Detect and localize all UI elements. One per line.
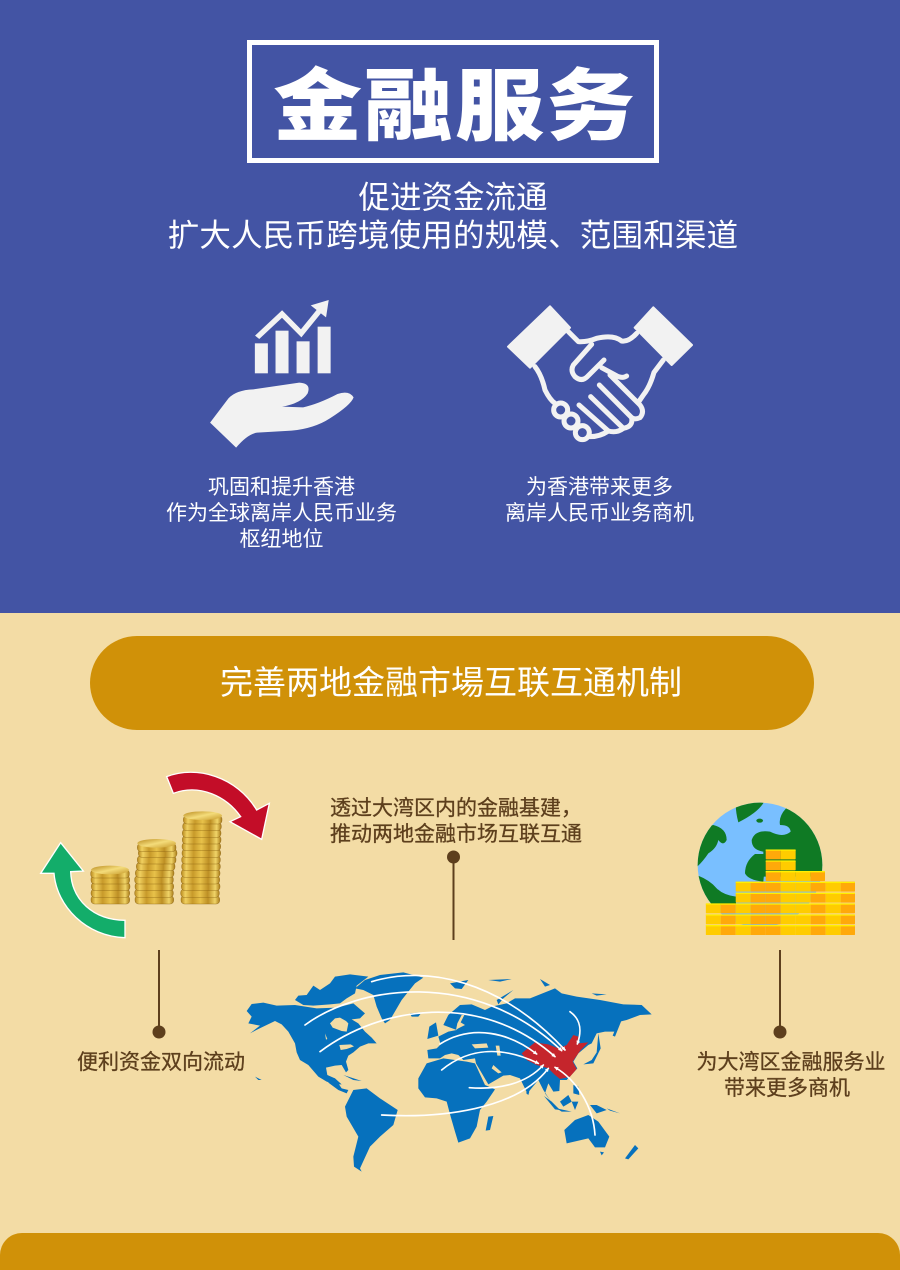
heading text: 完善两地金融市場互联互通机制 (220, 664, 682, 701)
icon: handshake (506, 305, 693, 442)
eurasia and china (427, 979, 652, 1101)
text: consolidate Hong Kong's hub status: 作为全球离岸人民币业务 (166, 502, 397, 525)
icon: hand holding rising chart (210, 300, 354, 448)
text: financial infrastructure (330, 796, 582, 846)
subtitle (168, 179, 738, 253)
text: consolidate Hong Kong's hub status: 巩固和提升香港 (208, 476, 355, 499)
text: financial infrastructure: 推动两地金融市场互联互通 (330, 823, 582, 846)
text: more business opportunities: 为香港带来更多 (526, 476, 673, 499)
oceania and south-east asia (564, 1115, 609, 1147)
connector: left (152, 950, 166, 1038)
text: more business for GBA financial services: 为大湾区金融服务业 (696, 1051, 886, 1074)
subtitle: 扩大人民币跨境使用的规模、范围和渠道 (168, 217, 738, 253)
connector: right (774, 950, 786, 1038)
text: two-way capital flow: 便利资金双向流动 (77, 1051, 245, 1074)
bottom gold band (0, 1233, 900, 1270)
heading pill: market connectivity (90, 636, 814, 730)
flow arcs (305, 975, 595, 1135)
text: consolidate Hong Kong's hub status: 枢纽地位 (240, 528, 324, 551)
icon: gold coin stacks with arrows (40, 772, 270, 938)
panel: blue header section (0, 0, 900, 613)
icon: globe with gold bars (698, 802, 855, 935)
subtitle: 促进资金流通 (358, 179, 548, 215)
text: financial infrastructure: 透过大湾区内的金融基建， (330, 797, 582, 820)
text: more business for GBA financial services: 带来更多商机 (724, 1077, 850, 1100)
text: more business opportunities: 离岸人民币业务商机 (505, 502, 694, 525)
text: more business opportunities (505, 476, 694, 525)
text: more business for GBA financial services (696, 1050, 886, 1100)
africa (418, 1058, 495, 1143)
text: consolidate Hong Kong's hub status (166, 476, 397, 551)
title: 金融服务 (273, 62, 637, 150)
americas (247, 972, 423, 1084)
title box (247, 40, 659, 163)
connector: centre (447, 850, 460, 940)
